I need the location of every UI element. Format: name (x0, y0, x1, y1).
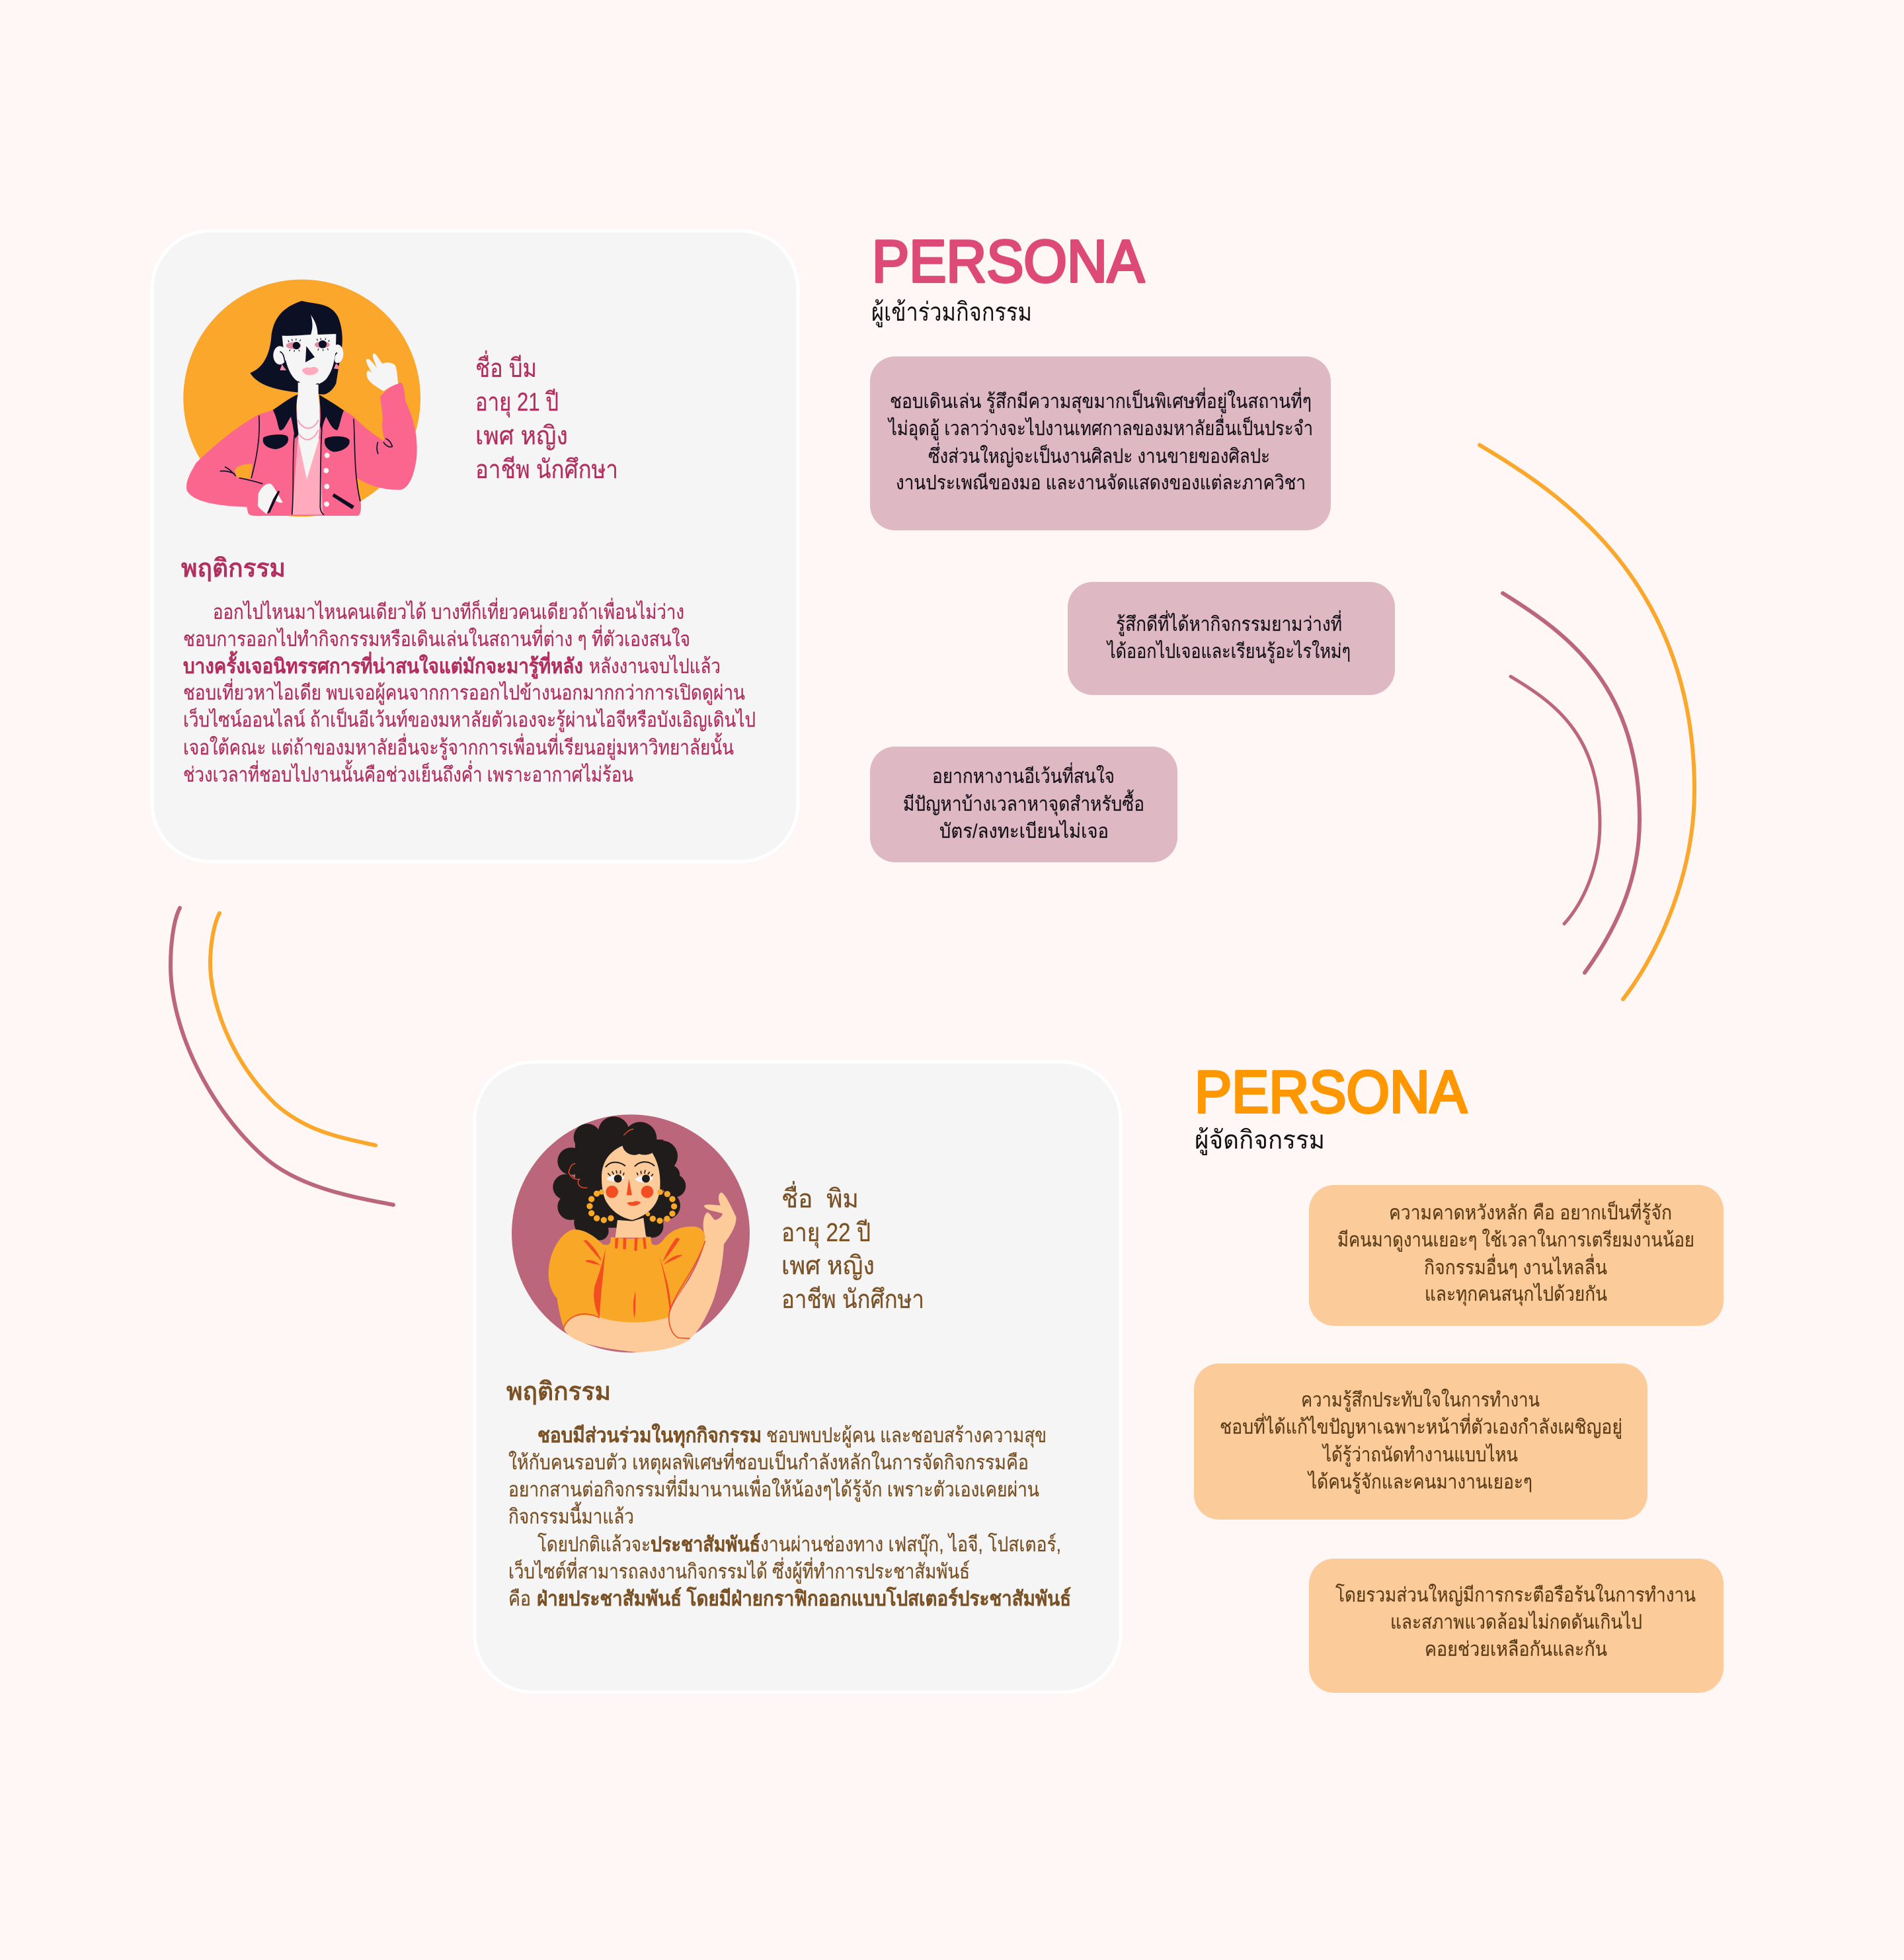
callout: participant lifestyle: งานประเพณีของมอ และงานจัดแสดงของแต่ละภาควิชา (896, 472, 1306, 494)
text block: participant behaviour: ออกไปไหนมาไหนคนเดียวได้ บางทีก็เที่ยวคนเดียวถ้าเพื่อนไม่ว่าง (213, 598, 684, 624)
text block: organiser behaviour: ประชาสัมพันธ์ (651, 1533, 760, 1556)
title: persona organiser: ผู้จัดกิจกรรม (1195, 1126, 1325, 1155)
callout: organiser impression (1194, 1364, 1647, 1520)
title: persona participant: PERSONA (872, 229, 1144, 295)
text block: organiser behaviour: ให้กับคนรอบตัว เหตุผลพิเศษที่ชอบเป็นกำลังหลักในการจัดกิจกรรมคือ (508, 1448, 1029, 1475)
organiser name and details: เพศ หญิง (781, 1252, 875, 1280)
callout: participant feeling (1068, 582, 1395, 695)
text block: organiser behaviour: โดยปกติแล้วจะ (537, 1533, 651, 1556)
icon: participant illustration (183, 280, 420, 516)
callout: participant feeling: รู้สึกดีที่ได้หากิจกรรมยามว่างที่ (1116, 610, 1342, 636)
organiser name and details: อาชีพ นักศึกษา (781, 1286, 924, 1314)
text block: participant behaviour: ช่วงเวลาที่ชอบไปงานนั้นคือช่วงเย็นถึงค่ำ เพราะอากาศไม่ร้อน (183, 760, 633, 786)
participant name and details: ชื่อ บีม (475, 350, 537, 383)
participant name and details: เพศ หญิง (475, 422, 568, 450)
participant name and details: อาชีพ นักศึกษา (475, 456, 618, 484)
text block: participant behaviour: หลังงานจบไปแล้ว (589, 655, 721, 678)
callout: organiser impression: ชอบที่ได้แก้ไขปัญหาเฉพาะหน้าที่ตัวเองกำลังเผชิญอยู่ (1220, 1413, 1622, 1439)
icon: organiser illustration (512, 1114, 750, 1352)
callout: organiser expectation: และทุกคนสนุกไปด้วยกัน (1425, 1282, 1607, 1307)
callout: organiser expectation: มีคนมาดูงานเยอะๆ ใช้เวลาในการเตรียมงานน้อย (1337, 1229, 1694, 1252)
panel: participant profile card (152, 231, 798, 862)
text block: organiser behaviour: ฝ่ายประชาสัมพันธ์ โดยมีฝ่ายกราฟิกออกแบบโปสเตอร์ประชาสัมพันธ์ (537, 1586, 1071, 1610)
callout: organiser work atmosphere: และสภาพแวดล้อมไม่กดดันเกินไป (1390, 1610, 1642, 1633)
callout: organiser impression: ได้คนรู้จักและคนมางานเยอะๆ (1307, 1470, 1532, 1494)
callout: organiser expectation: ความคาดหวังหลัก คือ อยากเป็นที่รู้จัก (1389, 1199, 1672, 1225)
text block: organiser behaviour: งานผ่านช่องทาง เฟสบุ๊ก, ไอจี, โปสเตอร์, (760, 1533, 1061, 1557)
callout: participant problem (870, 747, 1177, 862)
callout: organiser impression: ได้รู้ว่าถนัดทำงานแบบไหน (1322, 1443, 1518, 1467)
callout: participant problem: อยากหางานอีเว้นที่สนใจ (932, 762, 1115, 788)
text block: organiser behaviour (508, 1423, 1071, 1610)
text block: participant behaviour: บางครั้งเจอนิทรรศการที่น่าสนใจแต่มักจะมารู้ที่หลัง (183, 651, 583, 679)
organiser name and details: อายุ 22 ปี (781, 1219, 871, 1248)
text block: participant behaviour: ชอบการออกไปทำกิจกรรมหรือเดินเล่นในสถานที่ต่าง ๆ ที่ตัวเองสนใจ (183, 625, 690, 651)
callout: participant lifestyle: ไม่อุดอู้ เวลาว่างจะไปงานเทศกาลของมหาลัยอื่นเป็นประจำ (887, 415, 1313, 441)
text block: participant behaviour: เว็บไซน์ออนไลน์ ถ้าเป็นอีเว้นท์ของมหาลัยตัวเองจะรู้ผ่านไอจีหรือบังเอิญเดินไป (183, 708, 756, 732)
text block: participant behaviour: เจอใต้คณะ แต่ถ้าของมหาลัยอื่นจะรู้จากการเพื่อนที่เรียนอยู่มหาวิทยาลัยนั้น (183, 733, 734, 760)
callout: participant lifestyle (870, 356, 1331, 530)
text block: organiser behaviour: ชอบมีส่วนร่วมในทุกกิจกรรม (537, 1423, 762, 1448)
title: persona organiser (1195, 1059, 1467, 1155)
callout: participant lifestyle: ชอบเดินเล่น รู้สึกมีความสุขมากเป็นพิเศษที่อยู่ในสถานที่ๆ (890, 388, 1312, 414)
text block: organiser behaviour: อยากสานต่อกิจกรรมที่มีมานานเพื่อให้น้องๆได้รู้จัก เพราะตัวเองเคยผ่าน (508, 1475, 1039, 1502)
organiser name and details: ชื่อ พิม (781, 1181, 859, 1213)
text block: organiser behaviour: คือ (508, 1587, 531, 1610)
title: persona organiser: PERSONA (1195, 1059, 1467, 1125)
text block: organiser behaviour: เว็บไซต์ที่สามารถลงงานกิจกรรมได้ ซึ่งผู้ที่ทำการประชาสัมพันธ์ (508, 1557, 970, 1584)
arcs: right decorative curves (1480, 445, 1694, 999)
participant name and details (475, 350, 618, 484)
organiser name and details (781, 1181, 924, 1314)
title: persona participant (871, 229, 1144, 327)
callout: organiser expectation: กิจกรรมอื่นๆ งานไหลลื่น (1424, 1254, 1607, 1279)
callout: participant feeling: ได้ออกไปเจอและเรียนรู้อะไรใหม่ๆ (1106, 639, 1351, 663)
text block: participant behaviour: ชอบเที่ยวหาไอเดีย พบเจอผู้คนจากการออกไปข้างนอกมากกว่าการเปิดดูผ่าน (183, 678, 745, 705)
title: persona participant: ผู้เข้าร่วมกิจกรรม (871, 298, 1032, 327)
panel: organiser profile card (475, 1062, 1121, 1692)
callout: participant problem: มีปัญหาบ้างเวลาหาจุดสำหรับซื้อ (903, 790, 1144, 817)
callout: participant lifestyle: ซึ่งส่วนใหญ่จะเป็นงานศิลปะ งานขายของศิลปะ (928, 442, 1270, 468)
participant name and details: อายุ 21 ปี (475, 388, 559, 418)
callout: organiser impression: ความรู้สึกประทับใจในการทำงาน (1301, 1389, 1540, 1412)
text block: participant behaviour (183, 598, 756, 786)
heading: participant behaviour: พฤติกรรม (181, 555, 286, 583)
arcs: left decorative curves (171, 908, 393, 1205)
heading: organiser behaviour: พฤติกรรม (506, 1378, 611, 1406)
callout: organiser work atmosphere: คอยช่วยเหลือกันและกัน (1425, 1639, 1607, 1660)
callout: organiser expectation (1309, 1185, 1724, 1326)
callout: organiser work atmosphere: โดยรวมส่วนใหญ่มีการกระตือรือร้นในการทำงาน (1335, 1583, 1696, 1606)
text block: organiser behaviour: ชอบพบปะผู้คน และชอบสร้างความสุข (766, 1424, 1047, 1448)
text block: organiser behaviour: กิจกรรมนี้มาแล้ว (508, 1502, 634, 1528)
callout: participant problem: บัตร/ลงทะเบียนไม่เจอ (939, 819, 1109, 842)
callout: organiser work atmosphere (1309, 1559, 1724, 1693)
